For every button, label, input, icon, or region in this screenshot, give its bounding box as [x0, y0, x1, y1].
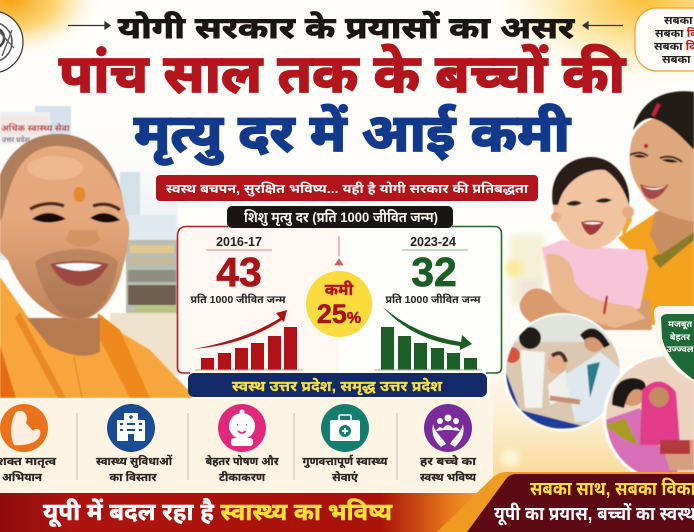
neck: [27, 318, 100, 356]
mother and baby photo: [520, 91, 694, 330]
title line one: योगी सरकार के प्रयासों का असर: [118, 10, 575, 45]
shield badge: [654, 306, 694, 382]
item: quality services: गुणवत्तापूर्ण स्वास्थ्य: [302, 454, 388, 469]
stat: 2023-24: 32: [411, 249, 457, 295]
title line three: मृत्यु दर में आई कमी: [134, 104, 572, 166]
panel: infant mortality rate: [177, 206, 502, 373]
red footer band: [0, 493, 500, 532]
stat: 2016-17: प्रति 1000 जीवित जन्म: [190, 293, 286, 306]
item: child future: हर बच्चे का: [420, 454, 477, 468]
item: maternal: अभियान: [2, 471, 43, 484]
panel heading: [227, 206, 453, 228]
photo circle: doctor and baby: [504, 312, 622, 432]
eyes: [32, 213, 66, 222]
panel heading: शिशु मृत्यु दर (प्रति 1000 जीवित जन्म): [244, 209, 438, 227]
stat: 2016-17: 43: [216, 249, 262, 295]
red tagline banner: [156, 175, 538, 201]
shield badge: मजबूत: [668, 319, 692, 330]
mother sari: [618, 212, 694, 325]
baby arm: [546, 254, 646, 328]
photo circle: health workers and mothers: [602, 354, 694, 472]
item: child future: स्वस्थ भविष्य: [420, 471, 477, 484]
item: nutrition: टीकाकरण: [219, 471, 266, 484]
nose: [66, 230, 100, 247]
baby dress: [542, 240, 648, 322]
maroon footer band: [437, 472, 694, 532]
hospital and city background: [0, 106, 178, 375]
arrow decoration left: [68, 22, 110, 29]
shield badge: उज्ज्वल: [666, 344, 694, 354]
item: child future: [420, 404, 477, 484]
item: nutrition: बेहतर पोषण और: [206, 454, 279, 468]
bar chart: rising: [195, 327, 303, 370]
item: hospital: का विस्तार: [110, 471, 157, 484]
stat: 2016-17: [190, 235, 286, 306]
item: hospital: [96, 404, 173, 484]
item: quality services: [302, 404, 388, 484]
arrow: falling: [383, 307, 472, 350]
stat: 2023-24: [386, 235, 481, 306]
panel: initiatives: [0, 398, 493, 494]
reduction badge: कमी: [325, 281, 354, 299]
navy slogan bar: [188, 373, 487, 397]
item: maternal: [0, 404, 57, 484]
item: quality services: सेवाएं: [332, 470, 359, 484]
navy slogan bar: स्वस्थ उत्तर प्रदेश, समृद्ध उत्तर प्रदेश: [232, 377, 442, 396]
stat: 2023-24: 2023-24: [410, 235, 456, 249]
mother face: [629, 115, 694, 222]
reduction badge: [306, 271, 372, 337]
bar chart: falling: [375, 327, 482, 370]
stubble: [35, 249, 118, 319]
hospital and city background: अधिक स्वास्थ्य सेवा: [1, 121, 70, 133]
arrow decoration right: [583, 22, 623, 29]
head: [0, 134, 129, 320]
baby head: [553, 159, 629, 249]
red footer band: यूपी में बदल रहा है स्वास्थ्य का भविष्य: [43, 498, 393, 527]
item: hospital: स्वास्थ्य सुविधाओं: [96, 454, 173, 469]
slogan pill: [635, 8, 694, 71]
mother hands: [520, 288, 652, 330]
brows: [30, 204, 120, 210]
reduction badge: 25%: [317, 299, 361, 329]
hospital and city background: उत्तर प्रदेश: [2, 136, 31, 144]
tilak: [74, 187, 85, 202]
item: nutrition: [206, 404, 279, 484]
shield badge: बेहतर: [670, 330, 691, 342]
stat: 2016-17: 2016-17: [216, 235, 262, 249]
portrait: chief minister: [0, 134, 192, 398]
mother hair: [633, 91, 694, 150]
divider arrow: [335, 236, 343, 274]
logo: seal: [0, 11, 23, 73]
title line two: पांच साल तक के बच्चों की: [59, 44, 626, 104]
mouth: [50, 261, 109, 286]
kurta and scarves: [0, 277, 192, 398]
arrow: rising: [193, 310, 287, 349]
red tagline banner: स्वस्थ बचपन, सुरक्षित भविष्य... यही है योगी सरकार की प्रतिबद्धता: [166, 181, 529, 198]
stat: 2023-24: प्रति 1000 जीवित जन्म: [386, 293, 481, 306]
